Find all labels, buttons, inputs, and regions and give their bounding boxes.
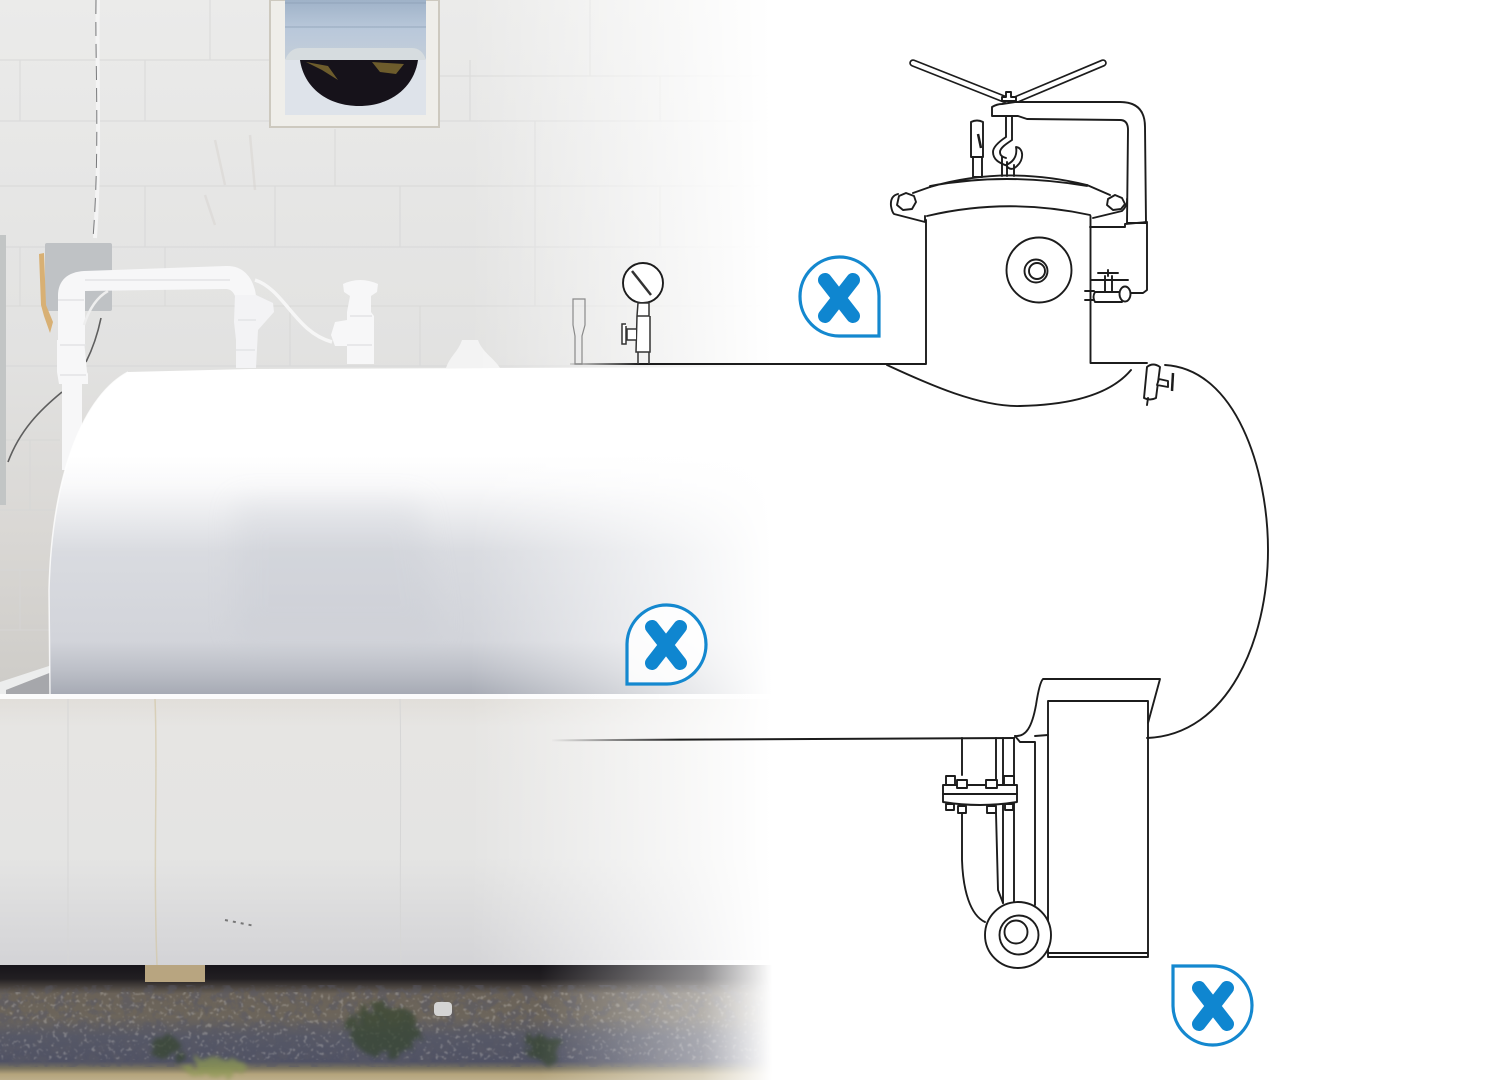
side conduit (84, 291, 108, 325)
chain link (1002, 147, 1022, 176)
riser walls (885, 216, 1132, 364)
hook (993, 116, 1012, 165)
saddle wrap (1015, 679, 1160, 736)
badge outline (1173, 966, 1252, 1045)
drain pipe (962, 738, 1003, 922)
bund rim behind tank (0, 665, 52, 697)
line drawing: tank outline (552, 364, 1268, 740)
drain valve (1085, 270, 1130, 302)
tank body (49, 367, 780, 697)
white pipework (57, 266, 500, 470)
wall vent (270, 0, 439, 127)
hand wheel nut (1002, 92, 1016, 101)
tank top line (570, 363, 885, 365)
marker badge: bottom (1173, 966, 1252, 1045)
dark gap behind bund (6, 672, 52, 694)
X mark (825, 280, 853, 316)
inner saddle arc (887, 365, 1131, 406)
line drawing: faint side valve (573, 299, 585, 364)
tank head curve (1147, 365, 1268, 738)
lid bolts (897, 193, 916, 210)
timber block (145, 965, 205, 982)
tank bottom line (552, 738, 1015, 740)
gauge valve (622, 324, 636, 344)
X mark (652, 627, 680, 663)
ground fade (540, 960, 780, 1080)
white fade over photo (470, 0, 780, 966)
flange bolts (946, 776, 1014, 813)
marker badge: top (800, 257, 879, 336)
sight valve (971, 120, 983, 177)
inner web (1003, 735, 1048, 905)
badge outline (800, 257, 879, 336)
side box (1090, 222, 1147, 293)
manway inner ring (1024, 260, 1048, 282)
support plate (1048, 701, 1148, 957)
pipe shading (58, 280, 372, 375)
electrical panel edge (0, 235, 6, 505)
yoke arm (992, 102, 1146, 223)
gauge needle (632, 271, 651, 295)
lid dome (930, 175, 1087, 187)
line drawing: lower saddle and drain assembly (943, 679, 1160, 968)
lid flange (891, 185, 1127, 222)
pipe flange (943, 776, 1017, 813)
pale stone (434, 1002, 452, 1016)
angle valve on tank shoulder (1132, 363, 1173, 405)
photo: gravel and grass ground (0, 960, 780, 1080)
drain wheel fitting (985, 902, 1051, 968)
marker badge: middle (627, 605, 706, 684)
hose (255, 280, 332, 342)
vegetation patches (149, 1004, 565, 1076)
line drawing: manway riser and lid (885, 63, 1173, 405)
conduit wire (93, 0, 98, 238)
gauge dial (623, 263, 663, 303)
gauge stem (636, 303, 650, 364)
block wall (0, 0, 780, 700)
concrete bund (0, 694, 780, 966)
orange lever (39, 253, 53, 333)
manway flange circle (1006, 238, 1072, 302)
line drawing: pressure gauge (622, 263, 663, 364)
badge outline (627, 605, 706, 684)
hand wheel arms (913, 63, 1103, 100)
dark wires (8, 318, 101, 462)
electrical box (45, 243, 112, 311)
photo: white storage tank against a block wall (0, 0, 780, 966)
X mark (1199, 988, 1227, 1024)
